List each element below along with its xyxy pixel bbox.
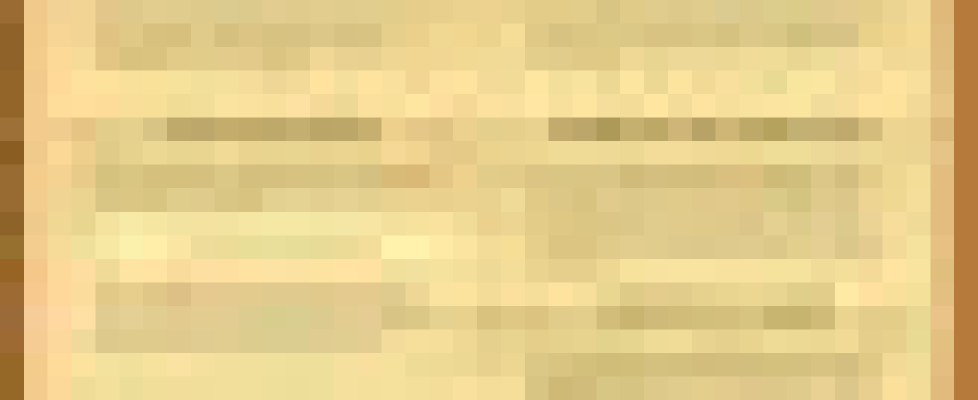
band: light gap row 11	[0, 259, 978, 282]
band: body text row 8	[0, 188, 978, 212]
band: footer row 16	[0, 376, 978, 400]
band: body text row 7	[0, 165, 978, 188]
band: light gap row 3	[0, 71, 978, 94]
band: muted block row 12	[0, 282, 978, 306]
band: top heading row 0	[0, 0, 978, 24]
band: pale block row 10	[0, 235, 978, 259]
band: muted block row 14	[0, 329, 978, 353]
band: top heading row 1	[0, 24, 978, 47]
band: dark subheading bars row 5	[0, 118, 978, 141]
band: light gap row 4	[0, 94, 978, 118]
band: light gap row 6	[0, 141, 978, 165]
band: muted block and dark bar row 13	[0, 306, 978, 329]
band: footer row 15	[0, 353, 978, 376]
band: pale block row 9	[0, 212, 978, 235]
band: top heading row 2	[0, 47, 978, 71]
